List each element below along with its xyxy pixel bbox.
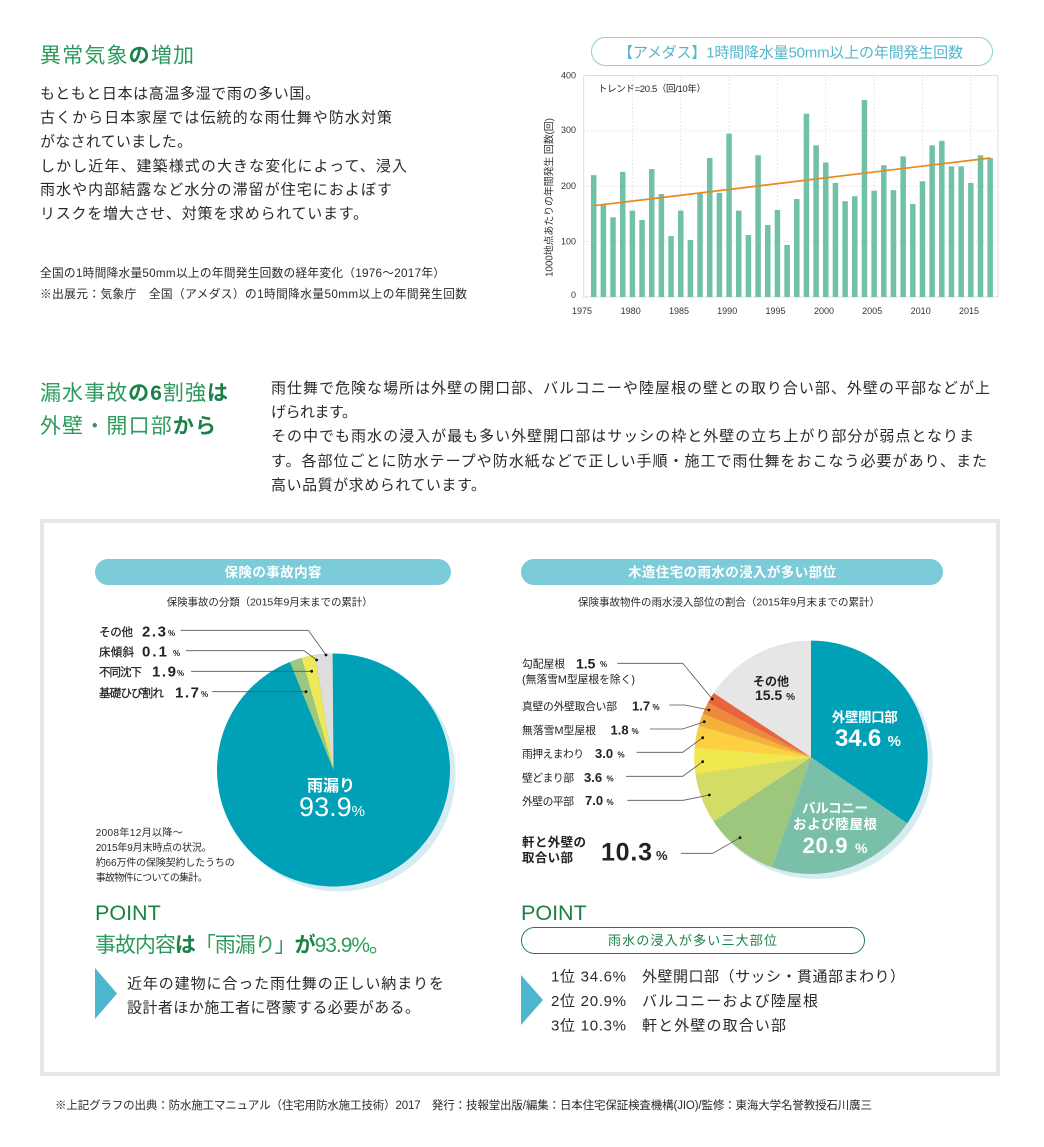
x axis ticks: 2010 bbox=[911, 306, 931, 316]
text block: intro: がなされていました。 bbox=[40, 134, 192, 150]
pie callouts: % bbox=[606, 774, 614, 784]
pie callouts: 真壁の外壁取合い部 bbox=[522, 699, 617, 713]
x axis ticks: 1975 bbox=[572, 306, 592, 316]
x axis ticks: 2015 bbox=[959, 306, 979, 316]
heading: increase of abnormal weather: 異常気象の増加 bbox=[40, 44, 194, 68]
text block: leak explanation: 高い品質が求められています。 bbox=[271, 476, 486, 494]
y axis ticks bbox=[561, 70, 576, 300]
note: aggregation period: 事故物件についての集計。 bbox=[96, 871, 208, 884]
ranking list: バルコニーおよび陸屋根 bbox=[642, 993, 818, 1010]
pie callouts: 基礎ひび割れ bbox=[99, 687, 164, 700]
pie callouts: 3.0 bbox=[595, 746, 613, 761]
ranking list: 外壁開口部（サッシ・貫通部まわり） bbox=[642, 968, 905, 986]
ranking list: 3位 10.3% bbox=[551, 1018, 626, 1034]
y axis ticks: 300 bbox=[561, 125, 576, 135]
text block: intro: もともと日本は高温多湿で雨の多い国。 bbox=[40, 84, 320, 102]
bar chart: annual occurrences bbox=[542, 70, 998, 316]
pie callouts: 床傾斜 bbox=[99, 646, 134, 659]
trend label: トレンド=20.5（回/10年） bbox=[598, 83, 706, 95]
icon: arrow bbox=[95, 968, 117, 1019]
pie callouts: % bbox=[652, 703, 660, 712]
text block: intro: しかし近年、建築様式の大きな変化によって、浸入 bbox=[40, 157, 407, 175]
pie callouts: 雨押えまわり bbox=[522, 746, 584, 760]
left point block: 事故内容は「雨漏り」が93.9%。 bbox=[95, 933, 390, 957]
x axis ticks: 1995 bbox=[765, 306, 786, 316]
y axis ticks: 0 bbox=[571, 290, 576, 300]
pill: top three locations bbox=[522, 928, 864, 954]
left point block bbox=[95, 901, 444, 1019]
icon: arrow bbox=[521, 975, 543, 1025]
pie callouts: 軒と外壁の bbox=[522, 834, 586, 850]
pie chart: accident types bbox=[217, 654, 456, 892]
pie callouts: % bbox=[600, 660, 607, 669]
text block: leak explanation: げられます。 bbox=[271, 404, 357, 421]
pie callouts: % bbox=[656, 848, 668, 863]
ranking list bbox=[551, 968, 905, 1034]
heading: leaks from walls and openings: 漏水事故の6割強は bbox=[40, 382, 228, 405]
text block: leak explanation: 雨仕舞で危険な場所は外壁の開口部、バルコニーや陸屋根の壁との取り合い部、外壁の平部などが上 bbox=[271, 380, 990, 397]
pie value label: 93.9% bbox=[299, 792, 365, 822]
left point block: 近年の建物に合った雨仕舞の正しい納まりを bbox=[127, 976, 444, 992]
pie callouts: 1.5 bbox=[576, 656, 596, 672]
text block: data source bbox=[40, 266, 467, 301]
pie callouts: 7.0 bbox=[585, 793, 603, 808]
heading: leaks from walls and openings: 外壁・開口部から bbox=[40, 415, 216, 438]
slice labels: 34.6 % bbox=[835, 725, 901, 752]
pill: top three locations: 雨水の浸入が多い三大部位 bbox=[608, 933, 777, 948]
slice labels: その他 bbox=[753, 674, 789, 688]
pie callouts: 勾配屋根 bbox=[522, 658, 565, 670]
pie callouts: 0.1 bbox=[142, 644, 167, 660]
chart title pill bbox=[592, 38, 992, 66]
pie callouts: 1.8 bbox=[610, 722, 629, 738]
x axis ticks bbox=[572, 306, 979, 316]
pie callouts: % bbox=[618, 750, 625, 760]
pie callouts bbox=[99, 624, 327, 702]
panel: insurance accident data bbox=[42, 521, 998, 1074]
pie chart: water entry locations bbox=[694, 641, 933, 879]
text block: leak explanation: す。各部位ごとに防水テープや防水紙などで正しい手順・施工で雨仕舞をおこなう必要があり、また bbox=[271, 453, 987, 470]
y axis ticks: 200 bbox=[561, 181, 576, 191]
pie callouts: % bbox=[632, 727, 639, 736]
slice labels: および陸屋根 bbox=[793, 816, 878, 832]
chart title pill: 【アメダス】1時間降水量50mm以上の年間発生回数 bbox=[618, 44, 963, 62]
text block: intro bbox=[40, 84, 407, 222]
left pill heading bbox=[95, 559, 451, 585]
left pill heading: 保険の事故内容 bbox=[224, 564, 322, 580]
note: aggregation period: 約66万件の保険契約したうちの bbox=[96, 856, 235, 869]
slice labels: 15.5 % bbox=[755, 687, 795, 703]
slice labels bbox=[753, 674, 901, 858]
right pill heading bbox=[521, 559, 943, 585]
pie callouts bbox=[522, 656, 741, 866]
note: aggregation period bbox=[96, 826, 235, 884]
text block: intro: 古くから日本家屋では伝統的な雨仕舞や防水対策 bbox=[40, 110, 392, 126]
heading: leaks from walls and openings bbox=[40, 382, 228, 438]
left chart subtitle: 保険事故の分類（2015年9月末までの累計） bbox=[167, 596, 373, 608]
pie callouts: 取合い部 bbox=[522, 850, 573, 865]
slice labels: 20.9 % bbox=[802, 833, 868, 858]
pie callouts: その他 bbox=[99, 626, 134, 639]
trend line bbox=[594, 158, 990, 206]
left point block: POINT bbox=[95, 901, 161, 925]
pie callouts: 外壁の平部 bbox=[522, 795, 574, 808]
pie callouts: 1.7 bbox=[175, 684, 199, 702]
slice labels: 外壁開口部 bbox=[832, 709, 898, 725]
right chart subtitle: 保険事故物件の雨水浸入部位の割合（2015年9月末までの累計） bbox=[578, 596, 880, 608]
text block: leak explanation: その中でも雨水の浸入が最も多い外壁開口部はサッシの枠と外壁の立ち上がり部分が弱点となりま bbox=[271, 427, 974, 445]
pie callouts: % bbox=[168, 629, 175, 638]
ranking list: 軒と外壁の取合い部 bbox=[642, 1018, 786, 1034]
x axis ticks: 1990 bbox=[717, 306, 737, 316]
y axis ticks: 100 bbox=[561, 236, 576, 246]
pie value label bbox=[299, 777, 365, 822]
pie callouts: 10.3 bbox=[601, 838, 652, 866]
pie callouts: 2.3 bbox=[142, 624, 166, 640]
pie callouts: 無落雪M型屋根 bbox=[522, 723, 596, 737]
text block: intro: 雨水や内部結露など水分の滞留が住宅におよぼす bbox=[40, 182, 392, 198]
note: aggregation period: 2008年12月以降～ bbox=[96, 826, 183, 839]
note: aggregation period: 2015年9月末時点の状況。 bbox=[96, 841, 212, 854]
text block: leak explanation bbox=[271, 380, 990, 494]
pie callouts: % bbox=[177, 669, 184, 678]
slice labels: バルコニー bbox=[802, 801, 868, 816]
x axis ticks: 1980 bbox=[621, 306, 641, 316]
pie callouts: (無落雪M型屋根を除く) bbox=[522, 672, 635, 686]
right point block: POINT bbox=[521, 901, 587, 925]
x axis ticks: 1985 bbox=[669, 306, 689, 316]
pie callouts: 1.7 bbox=[632, 698, 650, 714]
pie callouts: 3.6 bbox=[584, 770, 602, 785]
text block: intro: リスクを増大させ、対策を求められています。 bbox=[40, 206, 368, 222]
x axis ticks: 2005 bbox=[862, 306, 882, 316]
text block: data source: ※出展元：気象庁 全国（アメダス）の1時間降水量50mm以上の年間発生回数 bbox=[40, 287, 467, 301]
ranking list: 1位 34.6% bbox=[551, 968, 626, 986]
y axis ticks: 400 bbox=[561, 70, 576, 80]
y axis title: 1000地点あたりの年間発生 回数(回) bbox=[542, 118, 556, 277]
pie callouts: 壁どまり部 bbox=[522, 772, 574, 784]
pie callouts: % bbox=[173, 649, 180, 658]
pie callouts: 1.9 bbox=[152, 664, 176, 680]
pie value label: 雨漏り bbox=[307, 777, 355, 795]
text block: data source: 全国の1時間降水量50mm以上の年間発生回数の経年変化（1976～2017年） bbox=[40, 266, 445, 280]
x axis ticks: 2000 bbox=[814, 306, 834, 316]
footnote: source: ※上記グラフの出典：防水施工マニュアル（住宅用防水施工技術）2017 発行：技報堂出版/編集：日本住宅保証検査機構(JIO)/監修：東海大学名誉教授石川廣三 bbox=[55, 1098, 872, 1112]
pie callouts: 不同沈下 bbox=[99, 665, 142, 679]
bars bbox=[591, 100, 993, 297]
right pill heading: 木造住宅の雨水の浸入が多い部位 bbox=[628, 564, 836, 580]
ranking list: 2位 20.9% bbox=[551, 993, 626, 1010]
pie callouts: % bbox=[201, 690, 208, 699]
right point block bbox=[521, 901, 905, 1034]
left point block: 設計者ほか施工者に啓蒙する必要がある。 bbox=[127, 1000, 420, 1016]
pie callouts: % bbox=[606, 798, 614, 807]
